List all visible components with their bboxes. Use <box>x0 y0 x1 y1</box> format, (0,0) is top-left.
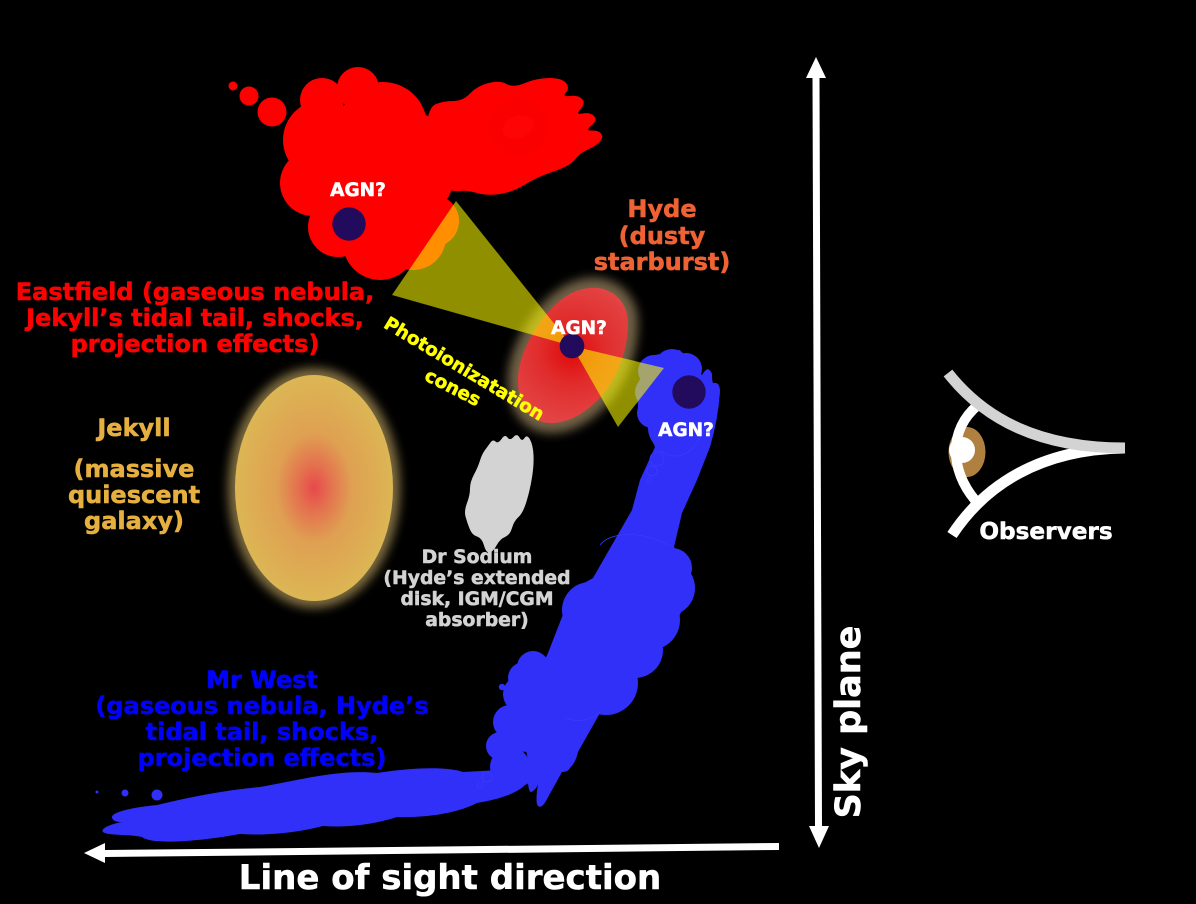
label: Dr Sodium: absorber) <box>425 610 529 631</box>
label: Dr Sodium <box>383 547 571 631</box>
label: Eastfield <box>16 278 374 358</box>
arrow: line of sight direction <box>84 843 779 863</box>
label: Jekyll: (massive <box>74 455 194 483</box>
label: Eastfield: projection effects) <box>71 330 319 358</box>
panel: Dr Sodium grey cloud <box>465 435 534 553</box>
label: Hyde: (dusty <box>619 222 706 250</box>
label: Mr West: tidal tail, shocks, <box>146 718 378 746</box>
label: Dr Sodium: Dr Sodium <box>422 547 532 568</box>
panel: Eastfield red nebula <box>228 67 602 280</box>
lower lobes <box>517 651 549 683</box>
label: Hyde <box>594 195 730 276</box>
label: Photoionization cones: Photoionizatation <box>380 313 548 425</box>
faint internal outlines <box>477 420 708 788</box>
icon: observer eye <box>948 373 1125 535</box>
label: Jekyll: quiescent <box>68 481 200 509</box>
icon: Mr West AGN <box>672 375 706 409</box>
panel: Hyde galaxy <box>518 288 628 423</box>
label: Dr Sodium: (Hyde’s extended <box>383 568 571 589</box>
label: Hyde: starburst) <box>594 248 730 276</box>
photoionization cones <box>392 201 664 427</box>
label: Eastfield: Jekyll’s tidal tail, shocks, <box>24 304 364 332</box>
Hyde dust shadow inside red tail <box>488 97 548 157</box>
label: Photoionization cones: cones <box>421 365 484 411</box>
label: sky plane: Sky plane <box>829 626 869 818</box>
panel: Mr West blue nebula <box>96 349 720 842</box>
label: Jekyll: galaxy) <box>84 507 184 535</box>
arm and head outline <box>520 350 720 807</box>
label: Jekyll: Jekyll <box>95 414 171 442</box>
arrow: sky plane <box>806 57 829 848</box>
label: Mr West: Mr West <box>206 666 318 694</box>
label: Mr West: projection effects) <box>138 744 386 772</box>
label: Hyde: Hyde <box>627 195 697 223</box>
label: observers: Observers <box>979 518 1113 545</box>
label: line of sight direction: Line of sight direction <box>239 858 661 898</box>
label: Eastfield: Eastfield (gaseous nebula, <box>16 278 374 306</box>
label: Mr West AGN: AGN? <box>658 420 714 441</box>
label: Dr Sodium: disk, IGM/CGM <box>400 589 554 610</box>
panel: Jekyll galaxy <box>228 368 400 608</box>
icon: Eastfield AGN <box>332 207 366 241</box>
icon: Hyde AGN <box>560 334 584 358</box>
label: Eastfield AGN: AGN? <box>330 180 386 201</box>
label: Mr West: (gaseous nebula, Hyde’s <box>95 692 429 720</box>
label: Hyde AGN: AGN? <box>551 318 607 339</box>
label: Jekyll <box>68 414 200 535</box>
label: Mr West <box>95 666 429 772</box>
tail <box>102 768 525 842</box>
